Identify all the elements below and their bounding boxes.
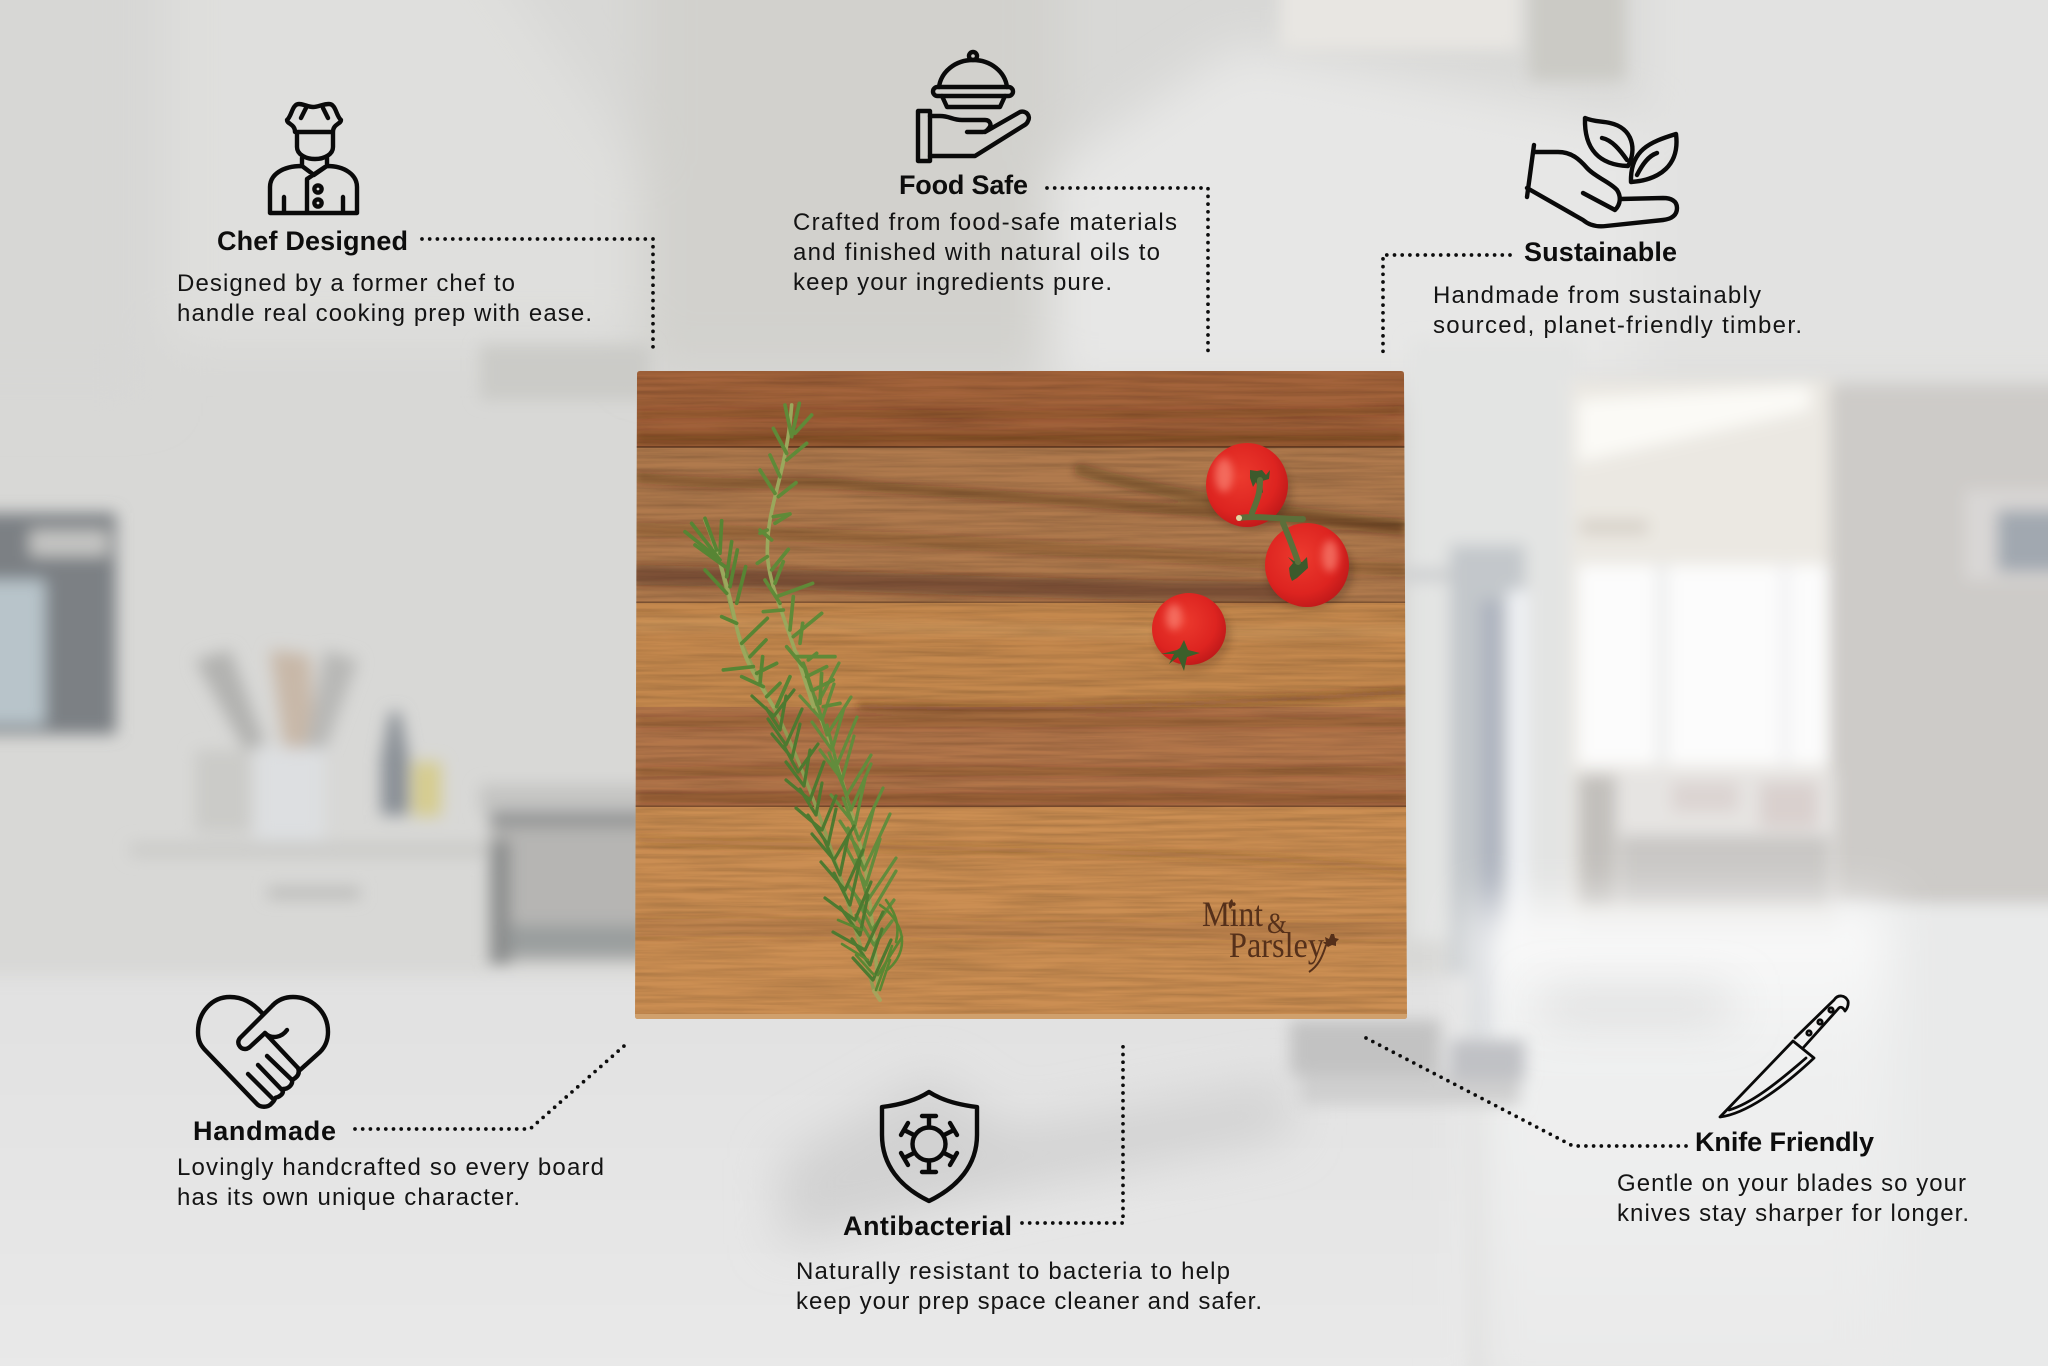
heading: Sustainable: Sustainable (1524, 237, 1677, 267)
right side (1404, 340, 2048, 1075)
panel: Chef Designed (177, 104, 653, 348)
description: Designed by a former chef to (177, 270, 515, 297)
panel: Sustainable (1383, 118, 1802, 356)
icon: cloche on hand (918, 52, 1029, 161)
panel: Food Safe (793, 52, 1208, 358)
connector (355, 1046, 624, 1129)
description: Handmade from sustainably (1433, 282, 1761, 309)
rosemary sprigs (685, 403, 902, 1000)
icon: shield with virus (882, 1092, 977, 1201)
logo: Mint & Parsley: & (1267, 907, 1287, 940)
heading: Knife Friendly: Knife Friendly (1695, 1127, 1874, 1157)
description: handle real cooking prep with ease. (177, 300, 592, 327)
connector (1383, 255, 1510, 356)
stove (480, 785, 650, 813)
oven (0, 513, 116, 734)
connector (1366, 1038, 1688, 1146)
description: keep your ingredients pure. (793, 269, 1112, 296)
cherry tomatoes on the vine (1152, 443, 1354, 671)
logo: Mint & Parsley: Parsley (1229, 925, 1324, 965)
description: keep your prep space cleaner and safer. (796, 1288, 1262, 1315)
wood board (630, 365, 1415, 1022)
description: Naturally resistant to bacteria to help (796, 1258, 1230, 1285)
connector (422, 239, 653, 348)
floor (0, 905, 2048, 1366)
description: Gentle on your blades so your (1617, 1170, 1966, 1197)
logo: Mint & Parsley (1202, 894, 1339, 972)
panel: Handmade (177, 997, 624, 1211)
logo: Mint & Parsley: Mint (1202, 894, 1263, 934)
panel: Antibacterial (796, 1040, 1262, 1315)
cutting board with rosemary, tomatoes and logo (630, 365, 1415, 1022)
description: knives stay sharper for longer. (1617, 1200, 1969, 1227)
upper needles (685, 403, 840, 707)
description: has its own unique character. (177, 1184, 520, 1211)
description: Lovingly handcrafted so every board (177, 1154, 604, 1181)
heading: Handmade: Handmade (193, 1116, 336, 1146)
icon: chef knife (1720, 996, 1848, 1117)
lower needles (719, 560, 874, 991)
connector (1022, 1040, 1123, 1223)
connector (1047, 188, 1208, 358)
heading: Chef Designed: Chef Designed (217, 226, 408, 256)
icon: handshake heart (198, 997, 328, 1107)
description: sourced, planet-friendly timber. (1433, 312, 1802, 339)
heading: Antibacterial: Antibacterial (843, 1211, 1012, 1241)
description: and finished with natural oils to (793, 239, 1160, 266)
icon: chef (270, 104, 357, 213)
heading: Food Safe: Food Safe (899, 170, 1028, 200)
panel: Knife Friendly (1366, 996, 1969, 1227)
icon: hand with sprout (1527, 118, 1677, 226)
description: Crafted from food-safe materials (793, 209, 1177, 236)
utensils and jars (195, 650, 265, 750)
